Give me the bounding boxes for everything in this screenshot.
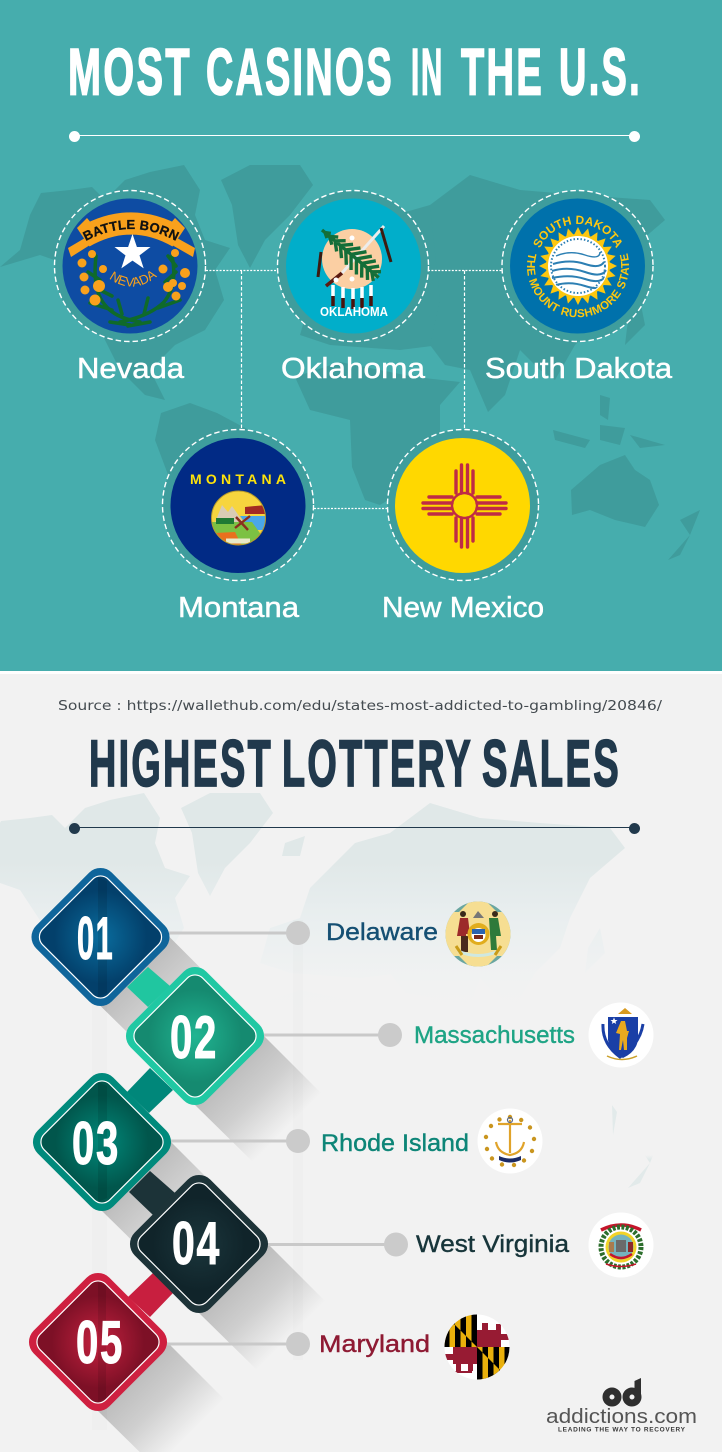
flag: South Dakota: THE MOUNT RUSHMORE STATE bbox=[526, 253, 630, 318]
title: highest lottery sales bbox=[89, 726, 621, 800]
step 04: 04 bbox=[172, 1210, 221, 1277]
source line: Source : https://wallethub.com/edu/states-most-addicted-to-gambling/20846/ bbox=[58, 699, 663, 714]
step 02: 02 bbox=[170, 1004, 218, 1071]
flag: South Dakota: SOUTH DAKOTA bbox=[534, 216, 622, 248]
panel: lottery background bbox=[0, 674, 722, 1452]
step 02 bbox=[119, 960, 271, 1112]
lottery title divider bbox=[69, 823, 640, 834]
logo: addictions.com: addictions.com bbox=[546, 1405, 697, 1428]
world map: lottery panel bbox=[0, 793, 660, 1198]
label: Oklahoma: Oklahoma bbox=[281, 353, 426, 385]
flag: New Mexico bbox=[388, 430, 538, 580]
flag: Oklahoma bbox=[278, 190, 428, 342]
world map: casinos panel bbox=[0, 165, 700, 570]
title: highest lottery sales: HIGHEST bbox=[89, 726, 273, 800]
label: Montana: Montana bbox=[178, 592, 300, 624]
flag: South Dakota bbox=[501, 190, 654, 342]
label: Rhode Island: Rhode Island bbox=[321, 1130, 469, 1157]
title: highest lottery sales: LOTTERY bbox=[282, 726, 473, 800]
connector 4-5 bbox=[128, 1273, 173, 1317]
seal: Massachusetts bbox=[588, 1002, 654, 1068]
seal: West Virginia bbox=[588, 1212, 654, 1278]
title: most casinos bbox=[68, 34, 642, 108]
world map: faint island sliver bbox=[612, 1105, 617, 1135]
long shadows bbox=[98, 937, 329, 1452]
title: highest lottery sales: SALES bbox=[482, 726, 621, 800]
logo: addictions.com bbox=[546, 1378, 697, 1434]
flag: Maryland bbox=[444, 1314, 510, 1380]
step 01 bbox=[25, 861, 176, 1013]
flag: Nevada: NEVADA bbox=[110, 271, 157, 287]
flag: Nevada: BATTLE BORN bbox=[82, 220, 180, 241]
faint vertical bands bbox=[92, 870, 303, 1430]
label: Delaware: Delaware bbox=[326, 919, 438, 946]
step 05: 05 bbox=[76, 1309, 124, 1376]
title: most casinos: THE bbox=[461, 34, 544, 108]
flag: Montana: MONTANA bbox=[190, 471, 290, 487]
step 03: 03 bbox=[72, 1110, 120, 1177]
logo: addictions.com: LEADING THE WAY TO RECOVERY bbox=[558, 1426, 686, 1434]
gap between panels bbox=[0, 671, 722, 674]
title: most casinos: MOST bbox=[68, 34, 192, 108]
dotted connector lines bbox=[206, 270, 502, 508]
label: West Virginia: West Virginia bbox=[416, 1231, 569, 1258]
title: most casinos: U.S. bbox=[559, 34, 642, 108]
label: Maryland: Maryland bbox=[319, 1331, 430, 1358]
seal: Rhode Island bbox=[478, 1108, 542, 1174]
flag: Nevada bbox=[54, 190, 206, 342]
panel: casinos background bbox=[0, 0, 722, 671]
step 03 bbox=[26, 1066, 178, 1218]
seal: Delaware bbox=[446, 902, 510, 966]
step 05 bbox=[22, 1266, 174, 1418]
label: Massachusetts: Massachusetts bbox=[414, 1022, 575, 1049]
connector 3-4 bbox=[129, 1171, 175, 1215]
flag: Oklahoma: OKLAHOMA bbox=[320, 305, 388, 319]
leader lines and dots bbox=[167, 921, 408, 1356]
step 01: 01 bbox=[77, 905, 114, 972]
connector 2-3 bbox=[127, 1068, 173, 1113]
title: most casinos: CASINOS bbox=[206, 34, 394, 108]
flag: Montana bbox=[162, 430, 314, 580]
title divider bbox=[69, 131, 640, 142]
label: Nevada: Nevada bbox=[77, 353, 185, 385]
connector 1-2 bbox=[127, 967, 170, 1007]
title: most casinos: IN bbox=[411, 34, 444, 108]
step 04 bbox=[123, 1168, 275, 1320]
label: South Dakota: South Dakota bbox=[485, 353, 673, 385]
label: New Mexico: New Mexico bbox=[382, 592, 544, 624]
